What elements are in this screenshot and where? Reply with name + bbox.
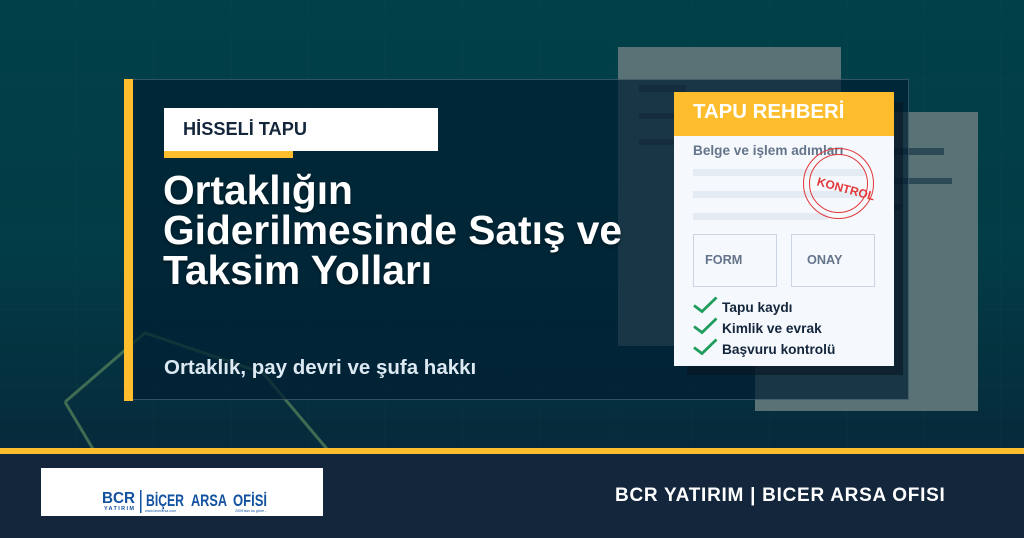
- onay box: ONAY: [807, 253, 842, 267]
- check item 2: [693, 318, 822, 336]
- card shadow: [687, 102, 903, 375]
- check item 3: Başvuru kontrolü: [722, 342, 835, 356]
- card: tapu rehberi: [674, 92, 894, 366]
- back document left: [618, 47, 841, 346]
- logo wordmark: YATIRIM: [104, 506, 134, 512]
- back document right: [755, 112, 978, 411]
- card header: [674, 92, 894, 136]
- title: Taksim Yolları: [163, 247, 432, 293]
- footer brand text: BCR YATIRIM | BICER ARSA OFISI: [615, 485, 946, 506]
- title: [163, 167, 622, 293]
- logo wordmark: OFİSİ: [233, 491, 267, 510]
- logo wordmark: www.bicerarsa.com: [145, 509, 176, 513]
- logo wordmark: [102, 490, 267, 513]
- logo wordmark: BCR: [102, 490, 135, 507]
- subtitle: Ortaklık, pay devri ve şufa hakkı: [164, 356, 476, 379]
- onay box: [791, 234, 875, 287]
- tag text: HİSSELİ TAPU: [183, 119, 307, 139]
- card subtitle: Belge ve işlem adımları: [693, 143, 843, 158]
- check item 2: Kimlik ve evrak: [722, 320, 822, 336]
- card header text: TAPU REHBERİ: [693, 101, 844, 123]
- check item 1: Tapu kaydı: [722, 300, 792, 314]
- tag background: [164, 108, 438, 151]
- footer yellow rule: [0, 448, 1024, 454]
- footer: [0, 448, 1024, 538]
- logo wordmark: ARSA: [191, 491, 227, 510]
- tag: category: [164, 108, 438, 158]
- title: Ortaklığın: [163, 167, 353, 213]
- check item 3: [693, 338, 835, 357]
- form box: FORM: [705, 253, 742, 267]
- yellow accent bar: [124, 79, 133, 401]
- card lines: [693, 169, 865, 220]
- title: Giderilmesinde Satış ve: [163, 207, 622, 253]
- check item 1: [693, 296, 792, 315]
- main dark panel: [124, 79, 909, 400]
- stamp: KONTROL: [816, 175, 876, 203]
- logo wordmark: 2009'dan bu güne...: [234, 509, 267, 513]
- form box: [693, 234, 777, 287]
- tag underline: [164, 151, 293, 158]
- stamp: [803, 148, 876, 219]
- logo box: [41, 468, 323, 516]
- document lines: [639, 85, 686, 92]
- checklist: [693, 296, 835, 357]
- logo wordmark: BİÇER: [146, 491, 184, 510]
